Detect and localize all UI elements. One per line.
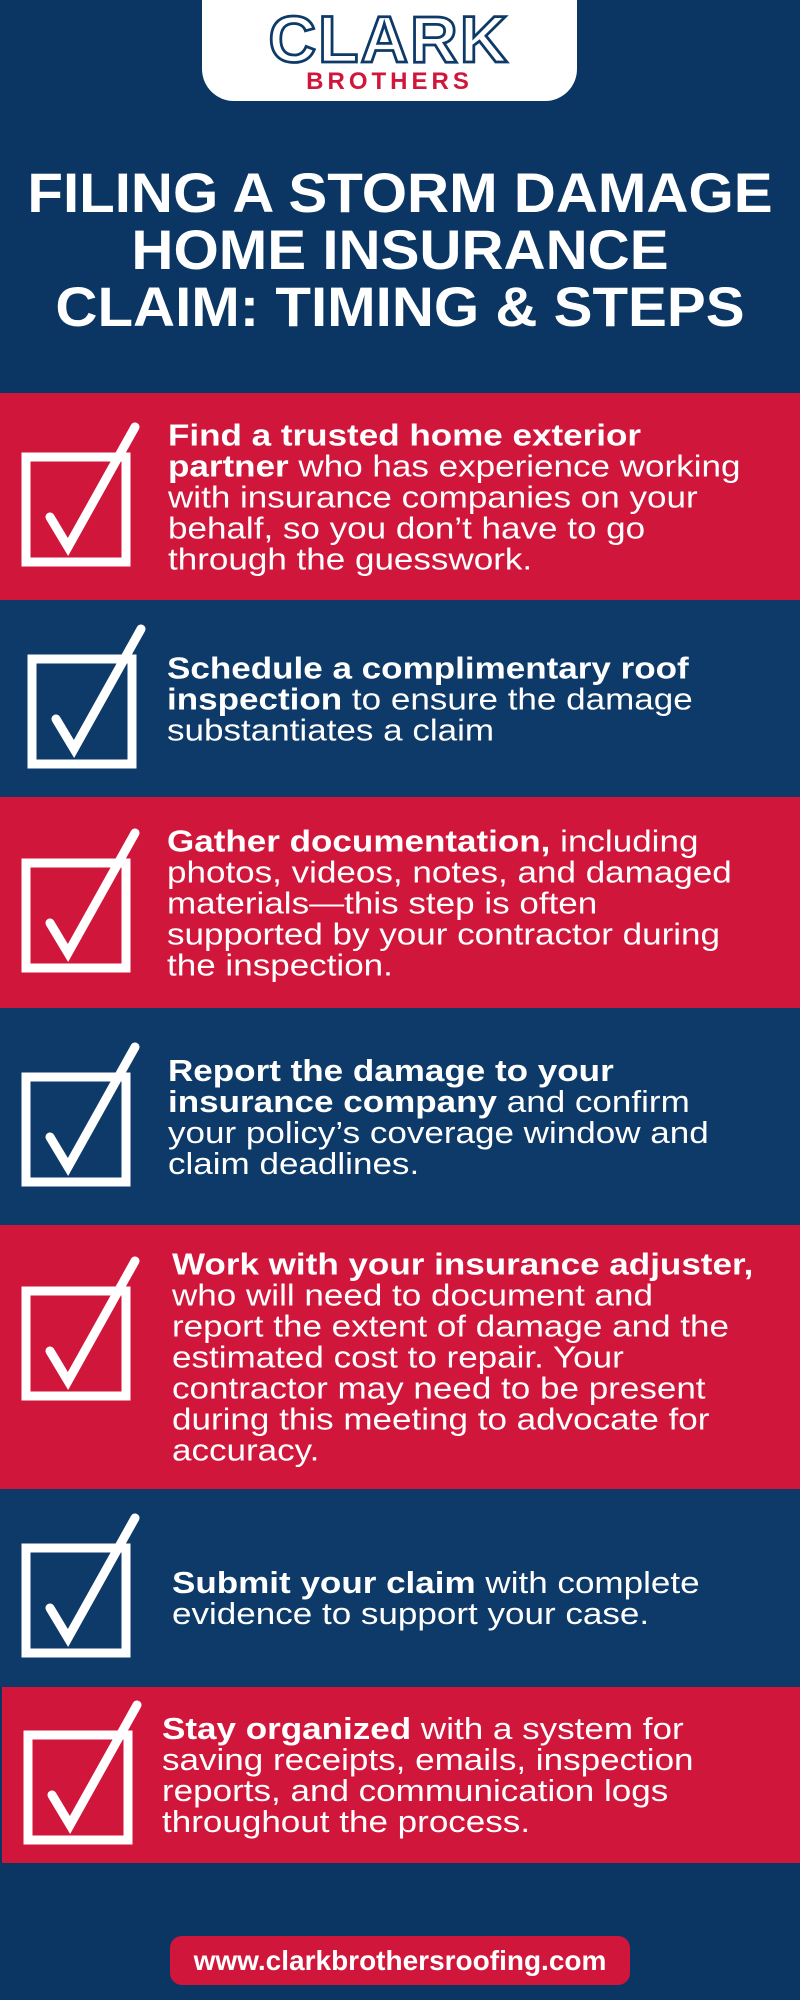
title: FILING A STORM DAMAGE (27, 161, 773, 224)
text: substantiates a claim (167, 712, 494, 747)
text: Gather documentation, including (167, 823, 698, 858)
step 5 (0, 1225, 800, 1489)
icon: checkbox (22, 422, 140, 566)
icon: checkbox (22, 1514, 140, 1658)
text: accuracy. (172, 1432, 319, 1468)
text: claim deadlines. (168, 1146, 419, 1180)
text: Work with your insurance adjuster, (172, 1246, 753, 1282)
text: Find a trusted home exterior (168, 417, 641, 452)
text: supported by your contractor during (167, 916, 720, 951)
text (168, 1052, 709, 1180)
text: the inspection. (167, 947, 393, 982)
step 2 (0, 600, 800, 797)
text: contractor may need to be present (172, 1370, 706, 1406)
text: photos, videos, notes, and damaged (167, 854, 732, 889)
text: through the guesswork. (168, 541, 532, 576)
text (172, 1246, 753, 1468)
text: Submit your claim with complete (172, 1565, 700, 1600)
step 1 (0, 393, 800, 600)
text: Report the damage to your (168, 1052, 614, 1088)
text: throughout the process. (162, 1804, 530, 1839)
icon: checkbox (22, 1042, 140, 1186)
step 7 (2, 1687, 800, 1863)
text: insurance company and confirm (168, 1084, 690, 1118)
step 4 (0, 1008, 800, 1225)
text: behalf, so you don’t have to go (168, 510, 645, 545)
icon: checkbox (22, 828, 140, 972)
footer url pill (170, 1936, 630, 1985)
text: estimated cost to repair. Your (172, 1340, 624, 1374)
text: Stay organized with a system for (162, 1711, 684, 1746)
text: your policy’s coverage window and (168, 1114, 709, 1150)
text: during this meeting to advocate for (172, 1402, 709, 1436)
icon: checkbox (24, 1700, 142, 1844)
text: saving receipts, emails, inspection (162, 1742, 694, 1777)
text (162, 1711, 694, 1839)
icon: checkbox (22, 1256, 140, 1400)
logo box (202, 0, 577, 101)
text (167, 650, 693, 747)
title (27, 161, 773, 338)
text (168, 417, 740, 576)
text: report the extent of damage and the (172, 1308, 729, 1344)
title: CLAIM: TIMING & STEPS (55, 275, 745, 338)
logo: BROTHERS: BROTHERS (306, 68, 473, 95)
text: materials—this step is often (167, 885, 597, 920)
icon: checkbox (28, 624, 146, 768)
footer url pill: www.clarkbrothersroofing.com (194, 1945, 606, 1976)
text: inspection to ensure the damage (167, 681, 693, 716)
text: evidence to support your case. (172, 1596, 649, 1631)
text (167, 823, 732, 982)
title: HOME INSURANCE (131, 218, 669, 281)
text (172, 1565, 700, 1631)
text: partner who has experience working (168, 448, 740, 483)
text: Schedule a complimentary roof (167, 650, 689, 685)
step 3 (0, 797, 800, 1008)
text: with insurance companies on your (168, 479, 698, 514)
step 6 (0, 1489, 800, 1687)
text: who will need to document and (172, 1278, 653, 1312)
text: reports, and communication logs (162, 1773, 668, 1808)
